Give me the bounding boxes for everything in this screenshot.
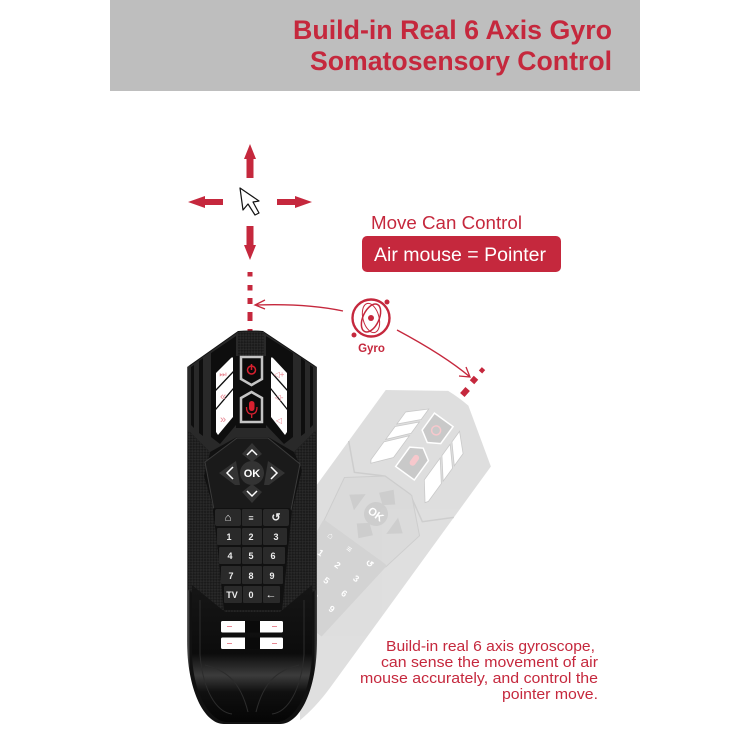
d-pad right	[264, 461, 285, 485]
description text: pointer move.	[502, 686, 598, 703]
ghost remote tilted: 6	[339, 588, 349, 599]
description text	[360, 638, 598, 703]
arrow down	[244, 226, 256, 260]
title	[293, 15, 612, 76]
left white buttons	[216, 357, 233, 435]
main black remote	[187, 330, 317, 724]
shoulder stripes	[191, 336, 313, 444]
arrow left	[188, 196, 223, 208]
remote body	[187, 330, 317, 724]
power button	[241, 357, 262, 385]
keypad: 5	[248, 551, 254, 561]
lower gloss lines	[200, 600, 304, 714]
ok button: OK	[244, 468, 260, 480]
ghost remote tilted: ≡	[344, 543, 354, 555]
ghost remote tilted: 3	[351, 573, 361, 584]
keypad: TV	[226, 590, 238, 600]
ghost remote tilted	[300, 390, 491, 720]
air mouse badge: Air mouse = Pointer	[374, 245, 547, 266]
ghost remote tilted: 2	[333, 560, 343, 571]
ghost remote tilted: 8	[310, 591, 320, 602]
curved arrow to tilted remote	[397, 330, 470, 377]
dotted pointer line	[248, 272, 252, 332]
keypad: 8	[248, 571, 254, 581]
direction arrows	[188, 144, 312, 260]
gyro icon	[352, 300, 390, 338]
keypad: 4	[227, 551, 233, 561]
white button glyphs: ◁+	[274, 370, 285, 379]
lower white button bottom	[221, 638, 283, 649]
d-pad left	[219, 461, 240, 485]
white button glyphs: ◁-	[275, 393, 284, 402]
keypad: 6	[270, 551, 276, 561]
move can control label: Move Can Control	[371, 213, 522, 233]
curved arrow to main remote	[255, 300, 343, 311]
ghost remote tilted: OK	[365, 505, 386, 525]
description text: mouse accurately, and control the	[360, 670, 598, 687]
upper dark panel	[188, 332, 316, 452]
infographic canvas	[110, 0, 640, 724]
ghost remote tilted: ↺	[364, 557, 376, 570]
title: Build-in Real 6 Axis Gyro	[293, 15, 612, 45]
keypad: ↺	[271, 512, 281, 524]
white button glyphs: «	[220, 391, 226, 403]
white button glyphs	[219, 370, 285, 426]
d-pad up	[242, 443, 262, 462]
d-pad down	[242, 484, 262, 503]
keypad: 3	[273, 532, 279, 542]
cursor icon	[240, 188, 259, 215]
gyro label: Gyro	[358, 343, 385, 355]
arrow right	[277, 196, 312, 208]
ok button	[240, 461, 264, 485]
ghost remote tilted: ⌂	[326, 530, 336, 541]
ghost remote tilted: 4	[304, 563, 314, 574]
keypad: ←	[266, 589, 276, 601]
keypad: 7	[228, 571, 234, 581]
white button glyphs: ⏭	[219, 370, 227, 379]
lower gloss panel	[192, 585, 312, 722]
keypad: ⌂	[225, 512, 231, 524]
top speaker grille	[238, 332, 264, 356]
white button glyphs: »	[220, 414, 226, 426]
ghost remote tilted: 1	[316, 547, 326, 558]
keypad	[213, 508, 291, 604]
keypad: 2	[248, 532, 254, 542]
description text: can sense the movement of air	[381, 654, 598, 671]
carbon side panel	[188, 430, 316, 612]
lower white button top	[221, 621, 283, 632]
description text: Build-in real 6 axis gyroscope,	[386, 638, 595, 655]
mic button	[241, 392, 262, 422]
right white buttons	[271, 357, 287, 435]
ghost remote tilted: 5	[321, 575, 331, 586]
ghost remote tilted: 7	[294, 579, 303, 591]
title: Somatosensory Control	[310, 46, 612, 76]
white button glyphs: ◁	[276, 416, 283, 425]
keypad: 9	[269, 571, 275, 581]
keypad: ≡	[248, 513, 254, 523]
keypad: 1	[226, 532, 232, 542]
air mouse badge	[362, 236, 561, 272]
keypad: 0	[248, 590, 254, 600]
dotted tilted line	[460, 367, 485, 397]
d-pad panel	[205, 438, 300, 510]
arrow up	[244, 144, 256, 178]
header banner	[110, 0, 640, 91]
ghost remote tilted: 9	[327, 604, 337, 615]
